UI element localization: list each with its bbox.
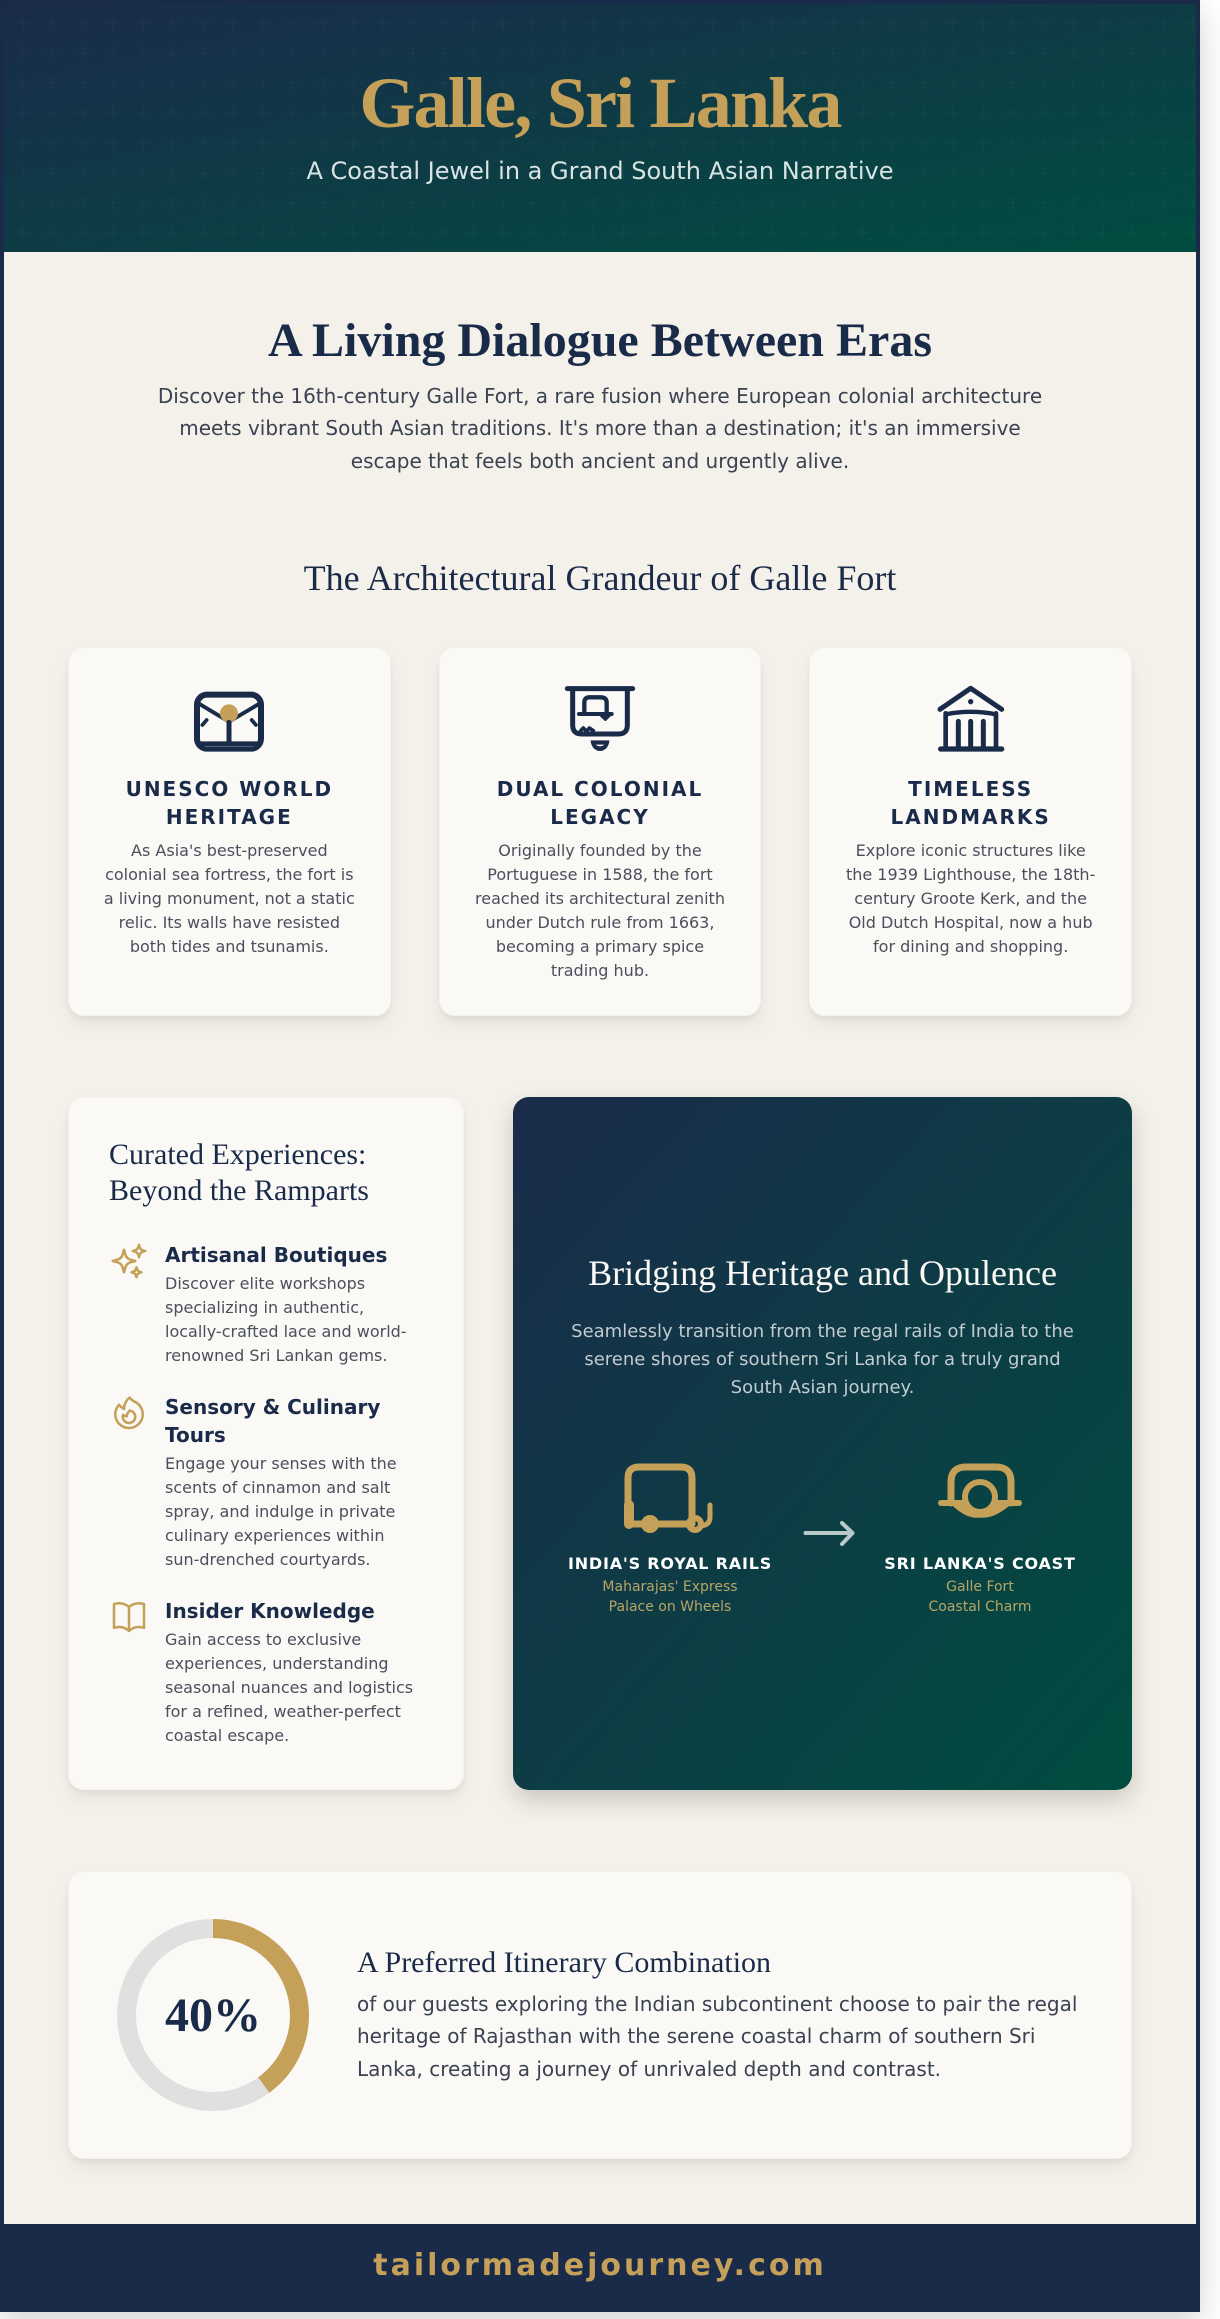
- panel: itinerary statistic: [68, 1871, 1132, 2159]
- card heading: [891, 777, 1051, 829]
- section heading: architecture: The Architectural Grandeur of Galle Fort: [304, 558, 896, 598]
- item text: sensory and culinary tours: sun-drenched courtyards.: [165, 1550, 371, 1569]
- sub-label: Sri Lanka places: [928, 1579, 1032, 1615]
- card text: colonial sea fortress, the fort is: [105, 865, 354, 884]
- side borders: [0, 252, 4, 2224]
- bridging paragraph: Seamlessly transition from the regal rails of India to the: [571, 1321, 1074, 1342]
- card text: [846, 841, 1095, 956]
- card heading: HERITAGE: [166, 805, 293, 829]
- sub-label: Sri Lanka places: Galle Fort: [946, 1579, 1014, 1595]
- card text: the 1939 Lighthouse, the 18th-: [846, 865, 1095, 884]
- card text: As Asia's best-preserved: [131, 841, 328, 860]
- card text: Originally founded by the: [498, 841, 702, 860]
- item text: sensory and culinary tours: culinary experiences within: [165, 1526, 385, 1545]
- subtitle: A Coastal Jewel in a Grand South Asian Narrative: [306, 157, 893, 185]
- sub-label: India trains: Palace on Wheels: [609, 1599, 731, 1615]
- icon: flame: [114, 1396, 144, 1430]
- card text: becoming a primary spice: [496, 937, 704, 956]
- card text: for dining and shopping.: [873, 937, 1068, 956]
- icon: open book: [112, 1602, 146, 1632]
- card text: Explore iconic structures like: [856, 841, 1086, 860]
- statistic paragraph: [357, 1992, 1077, 2081]
- card heading: TIMELESS: [908, 777, 1033, 801]
- card text: Old Dutch Hospital, now a hub: [849, 913, 1093, 932]
- item text: insider knowledge: coastal escape.: [165, 1726, 289, 1745]
- item text: artisanal boutiques: Discover elite workshops: [165, 1274, 365, 1293]
- bridging paragraph: serene shores of southern Sri Lanka for a truly grand: [584, 1349, 1061, 1370]
- item text: sensory and culinary tours: Engage your senses with the: [165, 1454, 397, 1473]
- intro paragraph: [158, 384, 1042, 473]
- card heading: UNESCO WORLD: [126, 777, 333, 801]
- header banner: [0, 0, 1200, 252]
- label: Sri Lanka's coast: SRI LANKA'S COAST: [884, 1554, 1076, 1573]
- item text: insider knowledge: [165, 1630, 413, 1745]
- card text: [475, 841, 725, 980]
- footer: [0, 2224, 1200, 2312]
- donut chart: 40 percent: [117, 1919, 309, 2111]
- item heading: artisanal boutiques: Artisanal Boutiques: [165, 1243, 387, 1267]
- icon: fortress emblem: [194, 692, 264, 752]
- panel: Timeless Landmarks: [809, 646, 1132, 1016]
- sub-label: India trains: Maharajas' Express: [602, 1579, 738, 1595]
- icon: scroll banner: [564, 686, 636, 751]
- donut chart: 40 percent: 40%: [165, 1989, 261, 2042]
- item text: artisanal boutiques: locally-crafted lace and world-: [165, 1322, 407, 1341]
- footer website: tailormadejourney.com: [373, 2248, 827, 2283]
- item text: insider knowledge: Gain access to exclusive: [165, 1630, 361, 1649]
- card text: reached its architectural zenith: [475, 889, 725, 908]
- panel: UNESCO World Heritage: [68, 646, 391, 1016]
- experiences heading: Beyond the Ramparts: [109, 1174, 369, 1207]
- item text: artisanal boutiques: renowned Sri Lankan gems.: [165, 1346, 387, 1365]
- card text: a living monument, not a static: [104, 889, 355, 908]
- bridging heading: Bridging Heritage and Opulence: [588, 1253, 1057, 1293]
- item text: insider knowledge: seasonal nuances and logistics: [165, 1678, 413, 1697]
- card text: under Dutch rule from 1663,: [486, 913, 714, 932]
- item heading: sensory and culinary tours: [165, 1395, 380, 1447]
- card heading: LANDMARKS: [891, 805, 1051, 829]
- icon: royal train: [624, 1464, 712, 1533]
- experiences heading: [109, 1138, 369, 1207]
- intro paragraph: escape that feels both ancient and urgently alive.: [351, 449, 849, 473]
- item text: insider knowledge: experiences, understanding: [165, 1654, 388, 1673]
- item heading: insider knowledge: Insider Knowledge: [165, 1599, 375, 1623]
- intro paragraph: meets vibrant South Asian traditions. It's more than a destination; it's an immersive: [179, 416, 1021, 440]
- item text: insider knowledge: for a refined, weather-perfect: [165, 1702, 401, 1721]
- card text: relic. Its walls have resisted: [119, 913, 340, 932]
- item heading: sensory and culinary tours: Sensory & Culinary: [165, 1395, 380, 1419]
- icon: sparkles: [112, 1244, 146, 1278]
- bridging paragraph: [571, 1321, 1074, 1398]
- panel: bridging heritage: [513, 1096, 1132, 1790]
- statistic paragraph: of our guests exploring the Indian subcontinent choose to pair the regal: [357, 1992, 1077, 2016]
- title: Galle, Sri Lanka: [359, 63, 841, 143]
- panel: Dual Colonial Legacy: [439, 646, 761, 1016]
- intro heading: A Living Dialogue Between Eras: [268, 314, 932, 367]
- item text: artisanal boutiques: specializing in authentic,: [165, 1298, 364, 1317]
- intro paragraph: Discover the 16th-century Galle Fort, a rare fusion where European colonial architecture: [158, 384, 1042, 408]
- card text: [104, 841, 355, 956]
- bridging paragraph: South Asian journey.: [731, 1377, 914, 1398]
- sub-label: Sri Lanka places: Coastal Charm: [928, 1599, 1032, 1615]
- card heading: LEGACY: [550, 805, 650, 829]
- statistic paragraph: Lanka, creating a journey of unrivaled depth and contrast.: [357, 2057, 941, 2081]
- card text: century Groote Kerk, and the: [854, 889, 1087, 908]
- card heading: [497, 777, 703, 829]
- label: India's royal rails: INDIA'S ROYAL RAILS: [568, 1554, 772, 1573]
- statistic paragraph: heritage of Rajasthan with the serene coastal charm of southern Sri: [357, 2024, 1035, 2048]
- card heading: DUAL COLONIAL: [497, 777, 703, 801]
- card text: Portuguese in 1588, the fort: [487, 865, 713, 884]
- item text: sensory and culinary tours: [165, 1454, 397, 1569]
- sub-label: India trains: [602, 1579, 738, 1615]
- item text: artisanal boutiques: [165, 1274, 407, 1365]
- icon: coastal arch: [938, 1464, 1022, 1518]
- item heading: sensory and culinary tours: Tours: [165, 1423, 226, 1447]
- card text: trading hub.: [551, 961, 649, 980]
- card heading: [126, 777, 333, 829]
- item text: sensory and culinary tours: scents of cinnamon and salt: [165, 1478, 390, 1497]
- statistic heading: A Preferred Itinerary Combination: [357, 1946, 771, 1979]
- icon: columned building: [938, 686, 1004, 752]
- experiences heading: Curated Experiences:: [109, 1138, 366, 1171]
- item text: sensory and culinary tours: spray, and indulge in private: [165, 1502, 395, 1521]
- arrow: [804, 1520, 855, 1546]
- panel: curated experiences: [68, 1096, 464, 1790]
- card text: both tides and tsunamis.: [130, 937, 329, 956]
